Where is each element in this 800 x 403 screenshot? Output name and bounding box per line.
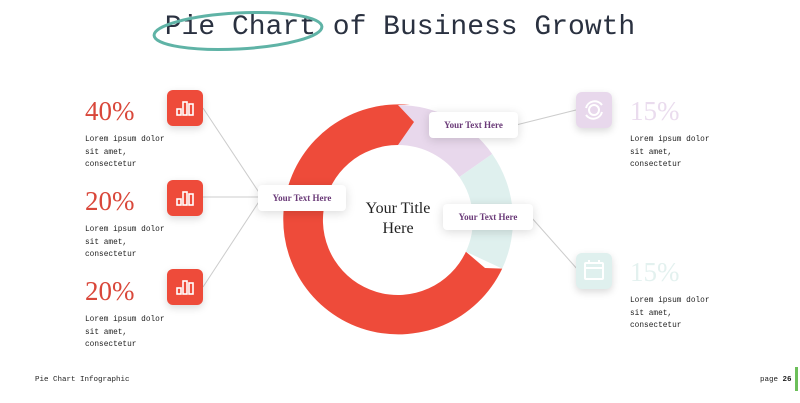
icon: bar chart 1 [167,90,203,126]
icon: bar chart 3 [167,269,203,305]
right item 2: sit amet, [630,310,672,318]
icon: money cycle [576,92,612,128]
right item 1 [630,96,710,169]
center title [366,200,430,237]
left item 1: consectetur [85,161,136,169]
center title: Your Title [366,200,430,217]
right item 2 [630,257,710,330]
title highlight ellipse [152,11,324,51]
right item 2: 15% [630,257,680,287]
callout mid right: Your Text Here [459,212,517,222]
right item 2: Lorem ipsum dolor [630,297,710,305]
left item 3: Lorem ipsum dolor [85,316,165,324]
left item 3: consectetur [85,341,136,349]
left item 2: Lorem ipsum dolor [85,226,165,234]
callout left: Your Text Here [273,193,331,203]
left item 2: consectetur [85,251,136,259]
left item 1: sit amet, [85,148,127,156]
footer page number: page 26 [760,376,792,384]
left item 1: Lorem ipsum dolor [85,136,165,144]
left item 3 [85,276,165,349]
callout mid right [443,204,533,230]
right item 2: consectetur [630,322,681,330]
footer left: Pie Chart Infographic [35,376,130,384]
callout top right [429,112,518,138]
footer green bar [795,367,798,391]
left item 2: sit amet, [85,238,127,246]
left item 1: 40% [85,96,134,126]
left item 1 [85,96,165,169]
left item 3: 20% [85,276,134,306]
right item 1: consectetur [630,161,681,169]
center title: Here [382,220,414,237]
icon: calendar [576,253,612,289]
left item 3: sit amet, [85,328,127,336]
right item 1: 15% [630,96,680,126]
callout top right: Your Text Here [444,120,503,130]
icon: bar chart 2 [167,180,203,216]
left item 2 [85,186,165,259]
callout left [258,185,346,211]
title: Pie Chart of Business Growth [165,12,635,43]
right item 1: sit amet, [630,148,672,156]
left item 2: 20% [85,186,134,216]
right item 1: Lorem ipsum dolor [630,136,710,144]
